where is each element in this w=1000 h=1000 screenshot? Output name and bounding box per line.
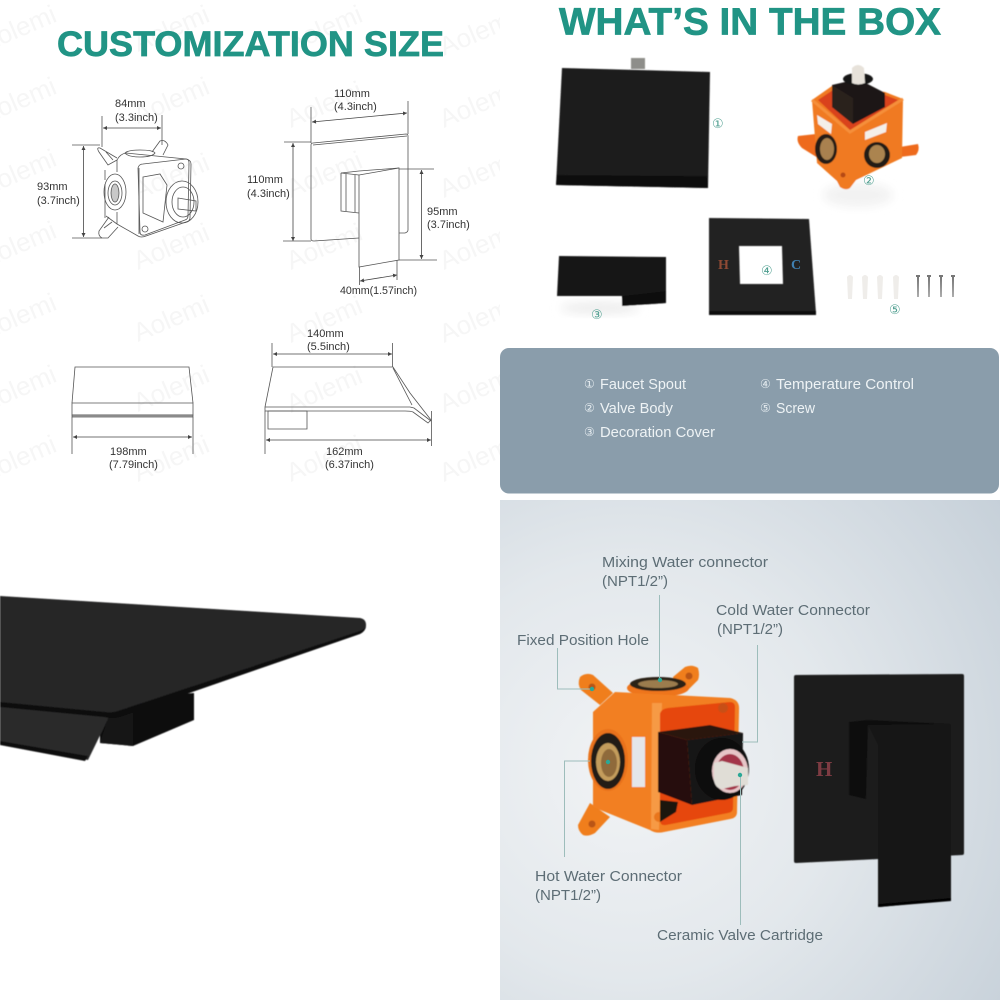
watermarks: Aolemi bbox=[435, 217, 520, 276]
legend: decoration cover: ③ bbox=[584, 425, 595, 439]
photo: waterfall spout close-up bbox=[0, 596, 366, 761]
diagram: valve body dimensions bbox=[37, 98, 198, 238]
dimension: 93mm: 93mm bbox=[37, 181, 68, 193]
watermarks: Aolemi bbox=[435, 429, 520, 488]
dimension: 40mm bbox=[340, 260, 417, 297]
dimension: 110mm width: 110mm bbox=[334, 88, 370, 100]
callout: fixed position hole bbox=[517, 632, 649, 691]
callout: mixing water connector: (NPT1/2”) bbox=[602, 573, 668, 590]
dimension: 95mm bbox=[399, 169, 470, 260]
box body bbox=[593, 692, 739, 833]
illustration: black trim and handle bbox=[794, 674, 964, 907]
legend: decoration cover: Decoration Cover bbox=[600, 425, 715, 441]
trim plate and handle line drawing bbox=[311, 134, 408, 267]
item 1: faucet spout bbox=[556, 58, 710, 188]
legend: valve body: ② bbox=[584, 401, 595, 415]
watermarks: Aolemi bbox=[129, 359, 214, 418]
callout: cold water connector bbox=[716, 602, 870, 742]
dimension: 84mm: 84mm bbox=[115, 98, 146, 110]
dimension: 162mm bbox=[266, 440, 431, 471]
dimension: 140mm bbox=[273, 328, 392, 354]
watermarks: Aolemi bbox=[129, 0, 214, 58]
callout: cold water connector: (NPT1/2”) bbox=[717, 621, 783, 638]
legend: temperature control: Temperature Control bbox=[776, 377, 914, 393]
dimension: 162mm: 162mm bbox=[326, 446, 363, 458]
dimension: 198mm: (7.79inch) bbox=[109, 459, 158, 471]
watermarks: Aolemi bbox=[435, 360, 520, 419]
dimension: 95mm: (3.7inch) bbox=[427, 219, 470, 231]
hot water port bbox=[588, 729, 628, 791]
watermarks: Aolemi bbox=[282, 429, 367, 488]
mounting ears bbox=[579, 674, 613, 705]
watermarks: Aolemi bbox=[435, 75, 520, 134]
dimension: 110mm height: (4.3inch) bbox=[247, 188, 290, 200]
watermarks: Aolemi bbox=[282, 290, 367, 349]
legend: screw: ⑤ bbox=[760, 401, 771, 415]
watermarks bbox=[0, 0, 520, 488]
dimension: 93mm: (3.7inch) bbox=[37, 195, 80, 207]
plate letter C: C bbox=[791, 258, 801, 273]
legend: screw: Screw bbox=[776, 401, 816, 417]
callout: mixing water connector: Mixing Water connector bbox=[602, 554, 768, 571]
dimension: 140mm: 140mm bbox=[307, 328, 344, 340]
legend: valve body: Valve Body bbox=[600, 401, 674, 417]
callout: ceramic valve cartridge: Ceramic Valve Cartridge bbox=[657, 927, 823, 944]
valve body line drawing bbox=[98, 140, 198, 238]
dimension: 162mm: (6.37inch) bbox=[325, 459, 374, 471]
callout: mixing water connector bbox=[602, 554, 768, 682]
callout: hot water connector bbox=[535, 760, 682, 904]
number 2: ② bbox=[863, 174, 875, 189]
number 1: ① bbox=[712, 117, 724, 132]
dimension: 110mm height: 110mm bbox=[247, 174, 283, 186]
spout lower lip bbox=[0, 705, 110, 760]
panel: parts legend bbox=[500, 348, 999, 494]
illustration: orange valve box bbox=[578, 666, 749, 836]
watermarks: Aolemi bbox=[282, 360, 367, 419]
callout: hot water connector: Hot Water Connector bbox=[535, 868, 682, 885]
watermarks: Aolemi bbox=[435, 3, 520, 62]
heading: what's in the box: WHAT’S IN THE BOX bbox=[559, 2, 942, 44]
watermarks: Aolemi bbox=[435, 290, 520, 349]
spout side line drawing bbox=[265, 343, 432, 454]
watermarks: Aolemi bbox=[129, 217, 214, 276]
dimension: 110mm width bbox=[311, 88, 408, 143]
dimension: 84mm: (3.3inch) bbox=[115, 112, 158, 124]
spout block bbox=[100, 693, 194, 746]
dimension: 110mm width: (4.3inch) bbox=[334, 101, 377, 113]
dimension: 198mm: 198mm bbox=[110, 446, 147, 458]
dimension: 198mm bbox=[73, 437, 192, 471]
item 3: decoration cover bbox=[557, 256, 666, 314]
callout: fixed position hole: Fixed Position Hole bbox=[517, 632, 649, 649]
dimension: 140mm: (5.5inch) bbox=[307, 341, 350, 353]
item 2: valve body bbox=[798, 65, 919, 207]
diagram: spout side dimensions bbox=[265, 328, 432, 471]
spout top surface bbox=[0, 596, 366, 715]
legend: faucet spout: ① bbox=[584, 377, 595, 391]
watermarks: Aolemi bbox=[282, 75, 367, 134]
dimension: 93mm bbox=[37, 145, 102, 238]
number 4: ④ bbox=[761, 264, 773, 279]
watermarks: Aolemi bbox=[282, 145, 367, 204]
callout: hot water connector: (NPT1/2”) bbox=[535, 887, 601, 904]
white label bbox=[632, 737, 645, 787]
watermarks: Aolemi bbox=[435, 145, 520, 204]
dimension: 84mm bbox=[102, 98, 162, 147]
box interior bbox=[660, 702, 735, 825]
what's in the box items bbox=[556, 58, 955, 323]
legend: temperature control: ④ bbox=[760, 377, 771, 391]
item 4: temperature control plate bbox=[709, 218, 816, 315]
dimension: 95mm: 95mm bbox=[427, 206, 458, 218]
watermarks: Aolemi bbox=[129, 289, 214, 348]
number 3: ③ bbox=[591, 308, 603, 323]
cartridge bbox=[658, 732, 692, 805]
top connector bbox=[627, 679, 689, 697]
callout: cold water connector: Cold Water Connector bbox=[716, 602, 870, 619]
trim letter H: H bbox=[816, 757, 832, 781]
watermarks: Aolemi bbox=[129, 147, 214, 206]
diagram: trim plate dimensions bbox=[247, 88, 470, 297]
dimension: 110mm height bbox=[247, 142, 311, 241]
item 5: screws and anchors bbox=[847, 275, 955, 299]
number 5: ⑤ bbox=[889, 303, 901, 318]
plate letter H: H bbox=[718, 258, 729, 273]
watermarks: Aolemi bbox=[282, 0, 367, 58]
legend: faucet spout: Faucet Spout bbox=[600, 377, 686, 393]
watermarks: Aolemi bbox=[129, 71, 214, 130]
heading: customization size: CUSTOMIZATION SIZE bbox=[57, 24, 444, 64]
spout front line drawing bbox=[72, 367, 193, 454]
watermarks: Aolemi bbox=[129, 429, 214, 488]
dimension: 40mm: 40mm(1.57inch) bbox=[340, 285, 417, 297]
watermarks: Aolemi bbox=[282, 217, 367, 276]
callout: ceramic valve cartridge bbox=[657, 773, 823, 944]
panel: valve anatomy bbox=[500, 500, 1000, 1000]
diagram: spout front dimensions bbox=[72, 367, 193, 471]
